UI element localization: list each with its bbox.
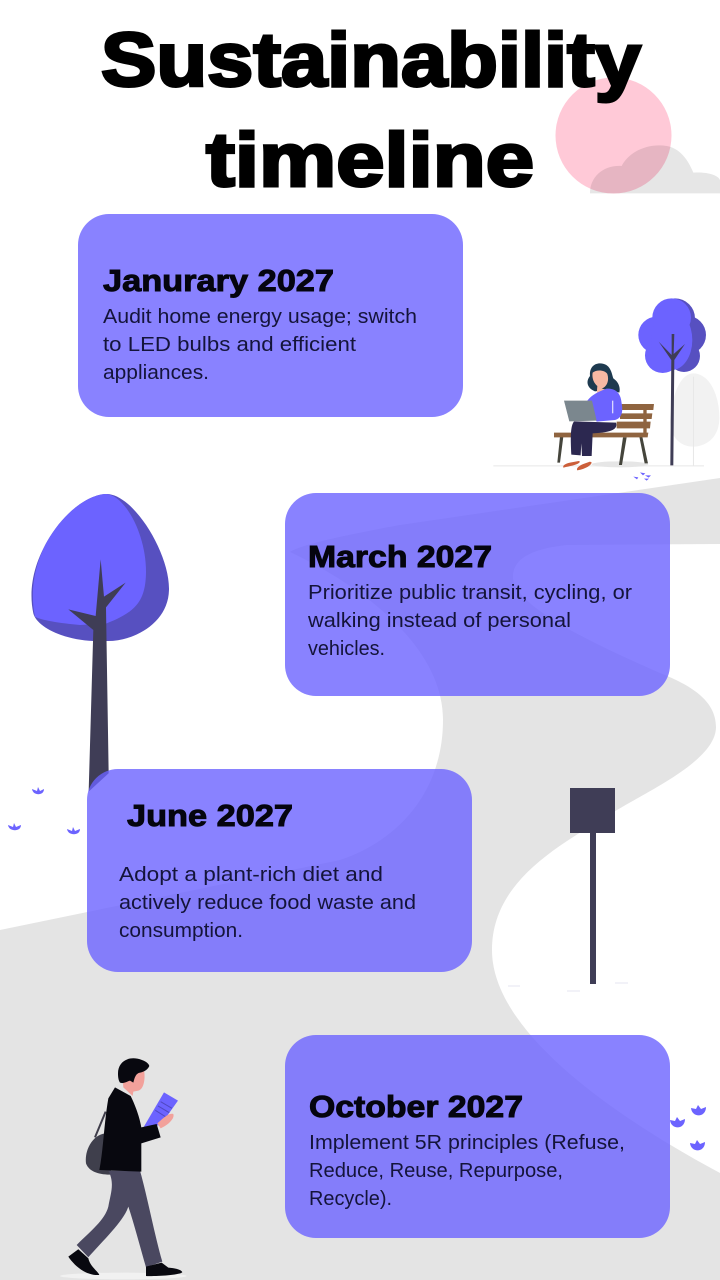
panel: October 2027 bbox=[285, 1035, 670, 1238]
torso bbox=[99, 1087, 161, 1172]
panel: January 2027: appliances. bbox=[103, 361, 209, 384]
pale background tree bbox=[670, 373, 719, 466]
bag bbox=[86, 1112, 112, 1175]
woman with laptop bbox=[563, 363, 622, 470]
panel: March 2027: walking instead of personal bbox=[307, 609, 571, 632]
purple tree bbox=[638, 298, 706, 465]
illustration: large purple tree bbox=[31, 494, 169, 792]
shoes bbox=[68, 1249, 182, 1276]
face bbox=[123, 1068, 145, 1096]
panel: June 2027: actively reduce food waste and bbox=[119, 891, 416, 914]
legs bbox=[77, 1171, 162, 1267]
title: Sustainability bbox=[101, 18, 641, 103]
panel: January 2027: Audit home energy usage; switch bbox=[103, 305, 417, 328]
icons: grass tufts left bbox=[8, 787, 80, 834]
panel: June 2027 bbox=[87, 769, 472, 972]
panel: October 2027: Reduce, Reuse, Repurpose, bbox=[309, 1159, 563, 1182]
panel: October 2027: October 2027 bbox=[309, 1089, 523, 1124]
panel: March 2027: March 2027 bbox=[308, 539, 492, 574]
bench bbox=[554, 404, 654, 467]
panel: June 2027: June 2027 bbox=[127, 798, 293, 833]
signpost bbox=[508, 788, 628, 991]
title bbox=[101, 18, 641, 203]
road: winding grey path bbox=[0, 478, 720, 1280]
panel: March 2027: vehicles. bbox=[308, 637, 385, 660]
panel: January 2027 bbox=[78, 214, 463, 417]
hair bbox=[118, 1058, 149, 1083]
icons: grass tufts right bbox=[670, 1105, 706, 1150]
panel: March 2027 bbox=[285, 493, 670, 696]
hand bbox=[157, 1114, 174, 1128]
ground line bbox=[493, 465, 704, 467]
panel: June 2027: Adopt a plant-rich diet and bbox=[119, 863, 383, 886]
scattered petals bbox=[633, 472, 651, 481]
panel: June 2027: consumption. bbox=[119, 919, 243, 942]
title: timeline bbox=[206, 118, 534, 203]
panel: October 2027: Implement 5R principles (Refuse, bbox=[309, 1131, 625, 1154]
panel: March 2027: Prioritize public transit, cycling, or bbox=[308, 581, 632, 604]
icon: cloud bbox=[590, 145, 720, 193]
illustration: man walking and reading bbox=[60, 1058, 187, 1279]
panel: October 2027: Recycle). bbox=[309, 1187, 392, 1210]
illustration: woman on bench with tree bbox=[493, 298, 719, 481]
panel: January 2027: to LED bulbs and efficient bbox=[103, 333, 356, 356]
icon: pink sun bbox=[556, 78, 672, 194]
paper bbox=[143, 1092, 178, 1128]
panel: January 2027: Janurary 2027 bbox=[103, 263, 334, 298]
